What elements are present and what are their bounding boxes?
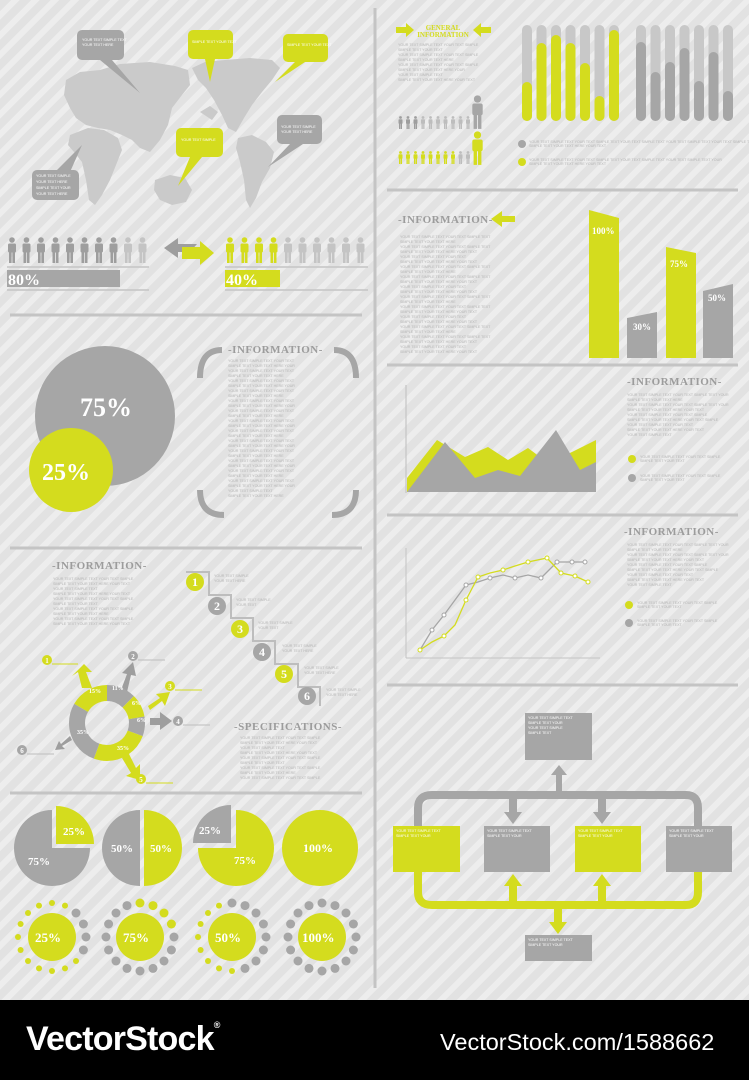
panel: information bracket: YOUR TEXT SIMPLE TEXT <box>228 489 274 493</box>
panel: information bracket: YOUR TEXT SIMPLE TEXT YOUR TEXT <box>228 479 295 483</box>
circles 75/25 <box>29 346 175 512</box>
line chart <box>406 526 729 658</box>
callout: map bubbles: SIMPLE TEXT YOUR <box>36 186 71 190</box>
area chart: SIMPLE TEXT YOUR TEXT HERE YOUR TEXT <box>627 408 705 412</box>
panel: information bracket: SIMPLE TEXT YOUR TEXT HERE YOUR <box>228 384 295 388</box>
footer: watermark bar <box>0 1000 749 1080</box>
pie charts row: 25% <box>63 826 85 838</box>
line chart: YOUR TEXT SIMPLE TEXT YOUR TEXT SIMPLE <box>637 619 718 623</box>
pie charts row: 75% <box>28 856 50 868</box>
panel: specifications: YOUR TEXT SIMPLE TEXT YOUR TEXT SIMPLE <box>240 776 321 780</box>
callout: map bubbles: YOUR TEXT SIMPLE <box>36 174 71 178</box>
line chart: YOUR TEXT SIMPLE TEXT YOUR TEXT SIMPLE TEXT YOUR <box>627 553 729 557</box>
circles 75/25: 75% <box>80 393 132 422</box>
callout: map bubbles: YOUR TEXT SIMPLE TEXT <box>82 38 128 42</box>
flowchart: YOUR TEXT SIMPLE TEXT <box>528 716 574 720</box>
panel: information bracket: SIMPLE TEXT YOUR TEXT HERE YOUR <box>228 424 295 428</box>
panel: information bar chart: SIMPLE TEXT YOUR TEXT HERE <box>400 270 456 274</box>
area chart <box>406 376 729 493</box>
donut chart with arrows: 15% <box>89 689 101 695</box>
panel: information bar chart: 30% <box>633 322 651 332</box>
panel: information bracket: YOUR TEXT SIMPLE TEXT YOUR TEXT <box>228 469 295 473</box>
staircase steps 1-6: YOUR TEXT SIMPLE <box>214 574 249 578</box>
footer url: VectorStock.com/1588662 <box>440 1029 714 1055</box>
flowchart: YOUR TEXT SIMPLE TEXT <box>669 829 715 833</box>
panel: information bracket <box>200 344 356 515</box>
panel: information bar chart: YOUR TEXT SIMPLE TEXT YOUR TEXT SIMPLE TEXT <box>400 305 491 309</box>
panel: information text (left middle) <box>52 560 147 626</box>
footer logo text: VectorStock® <box>26 1020 220 1058</box>
panel: general information: SIMPLE TEXT YOUR TEXT HERE YOUR <box>398 68 465 72</box>
people rows 80% / 40%: 40% <box>226 272 258 289</box>
bar chart: rounded bars: SIMPLE TEXT YOUR TEXT HERE YOUR TEXT <box>529 144 607 148</box>
dot ring charts: 75% <box>123 930 149 945</box>
line chart: YOUR TEXT SIMPLE TEXT YOUR TEXT <box>627 573 694 577</box>
panel: information bracket: SIMPLE TEXT YOUR TEXT HERE <box>228 434 284 438</box>
panel: information bar chart: SIMPLE TEXT YOUR TEXT HERE YOUR TEXT <box>400 340 478 344</box>
donut chart with arrows <box>17 651 210 784</box>
area chart: SIMPLE TEXT YOUR TEXT HERE YOUR TEXT <box>627 428 705 432</box>
panel: information text (left middle): SIMPLE TEXT YOUR TEXT <box>53 602 98 606</box>
panel: specifications: SIMPLE TEXT YOUR TEXT HERE <box>240 771 296 775</box>
staircase steps 1-6: YOUR TEXT HERE <box>282 649 314 653</box>
pie charts row: 25% <box>199 825 221 837</box>
callout: map bubbles: YOUR TEXT HERE <box>82 43 114 47</box>
donut chart with arrows: 1 <box>45 657 49 665</box>
panel: information bracket: SIMPLE TEXT YOUR TEXT HERE YOUR <box>228 464 295 468</box>
area chart: YOUR TEXT SIMPLE TEXT <box>627 433 673 437</box>
panel: specifications: SIMPLE TEXT YOUR TEXT <box>240 761 285 765</box>
staircase steps 1-6: 6 <box>304 689 310 703</box>
donut chart with arrows: 5 <box>139 776 143 784</box>
area chart: SIMPLE TEXT YOUR TEXT <box>640 478 685 482</box>
area chart: -INFORMATION- <box>627 376 722 388</box>
callout: map bubbles: SIMPLE TEXT YOUR TEXT <box>287 43 332 47</box>
panel: specifications: YOUR TEXT SIMPLE TEXT YOUR TEXT SIMPLE <box>240 756 321 760</box>
panel: specifications: SIMPLE TEXT YOUR TEXT HERE YOUR TEXT <box>240 751 318 755</box>
staircase steps 1-6 <box>186 572 361 706</box>
panel: specifications: YOUR TEXT SIMPLE TEXT YOUR TEXT SIMPLE <box>240 766 321 770</box>
bar chart: rounded bars <box>518 25 749 166</box>
callout: map bubbles: YOUR TEXT SIMPLE <box>281 125 316 129</box>
pie charts row: 50% <box>111 843 133 855</box>
panel: information bar chart: YOUR TEXT SIMPLE TEXT YOUR TEXT SIMPLE TEXT <box>400 235 491 239</box>
panel: information bracket: YOUR TEXT SIMPLE TEXT YOUR TEXT <box>228 399 295 403</box>
panel: information bracket: SIMPLE TEXT YOUR TEXT HERE <box>228 374 284 378</box>
donut chart with arrows: 35% <box>117 746 129 752</box>
panel: information bracket: SIMPLE TEXT YOUR TEXT HERE YOUR <box>228 484 295 488</box>
panel: general information: YOUR TEXT SIMPLE TEXT YOUR TEXT SIMPLE <box>398 53 479 57</box>
staircase steps 1-6: YOUR TEXT SIMPLE <box>282 644 317 648</box>
dot ring charts: 100% <box>302 930 334 945</box>
panel: information bar chart: 50% <box>708 293 726 303</box>
line chart: SIMPLE TEXT YOUR TEXT <box>637 605 682 609</box>
panel: information bar chart: SIMPLE TEXT YOUR TEXT HERE YOUR TEXT <box>400 250 478 254</box>
panel: information bracket: YOUR TEXT SIMPLE TEXT YOUR TEXT <box>228 359 295 363</box>
flowchart: SIMPLE TEXT YOUR <box>528 721 563 725</box>
panel: information bracket: -INFORMATION- <box>228 344 323 356</box>
donut chart with arrows: 6% <box>137 718 146 724</box>
area chart: SIMPLE TEXT YOUR TEXT <box>640 459 685 463</box>
panel: information bar chart: 100% <box>592 226 614 236</box>
panel: information bar chart: YOUR TEXT SIMPLE TEXT YOUR TEXT <box>400 345 467 349</box>
dot ring charts: 25% <box>35 930 61 945</box>
panel: information bar chart: YOUR TEXT SIMPLE TEXT YOUR TEXT SIMPLE TEXT <box>400 295 491 299</box>
panel: information text (left middle): SIMPLE TEXT YOUR TEXT HERE <box>53 612 109 616</box>
panel: information bracket: SIMPLE TEXT YOUR TEXT HERE <box>228 474 284 478</box>
line chart: SIMPLE TEXT YOUR TEXT HERE YOUR TEXT <box>627 558 705 562</box>
panel: information bracket: YOUR TEXT SIMPLE TEXT YOUR TEXT <box>228 429 295 433</box>
staircase steps 1-6: YOUR TEXT HERE <box>304 671 336 675</box>
dot ring charts <box>15 898 360 976</box>
callout: map bubbles: YOUR TEXT HERE <box>36 192 68 196</box>
area chart: SIMPLE TEXT YOUR TEXT HERE YOUR TEXT SIMPLE <box>627 418 719 422</box>
panel: information bar chart: SIMPLE TEXT YOUR TEXT HERE YOUR TEXT <box>400 290 478 294</box>
panel: information text (left middle): SIMPLE TEXT YOUR TEXT HERE YOUR TEXT <box>53 592 131 596</box>
staircase steps 1-6: YOUR TEXT SIMPLE <box>236 598 271 602</box>
flowchart: SIMPLE TEXT YOUR <box>669 834 704 838</box>
callout: map bubbles: YOUR TEXT HERE <box>281 130 313 134</box>
panel: information bar chart: SIMPLE TEXT YOUR TEXT HERE YOUR TEXT <box>400 260 478 264</box>
panel: information bar chart: SIMPLE TEXT YOUR TEXT HERE <box>400 300 456 304</box>
flowchart: YOUR TEXT SIMPLE TEXT <box>487 829 533 833</box>
panel: information text (left middle): YOUR TEXT SIMPLE TEXT YOUR TEXT SIMPLE <box>53 597 134 601</box>
panel: information bar chart: 75% <box>670 259 688 269</box>
donut chart with arrows: 35% <box>77 730 89 736</box>
panel: information bracket: SIMPLE TEXT YOUR TEXT HERE YOUR <box>228 444 295 448</box>
area chart: YOUR TEXT SIMPLE TEXT YOUR TEXT SIMPLE TEXT YOUR <box>627 403 729 407</box>
panel: information bar chart: YOUR TEXT SIMPLE TEXT YOUR TEXT <box>400 315 467 319</box>
line chart: SIMPLE TEXT YOUR TEXT HERE YOUR TEXT <box>627 578 705 582</box>
line chart: YOUR TEXT SIMPLE TEXT YOUR TEXT SIMPLE <box>627 563 708 567</box>
panel: information text (left middle): YOUR TEXT SIMPLE TEXT YOUR TEXT SIMPLE <box>53 607 134 611</box>
line chart: YOUR TEXT SIMPLE TEXT YOUR TEXT SIMPLE TEXT YOUR <box>627 543 729 547</box>
staircase steps 1-6: YOUR TEXT HERE <box>326 693 358 697</box>
flowchart: SIMPLE TEXT YOUR <box>578 834 613 838</box>
panel: information bar chart <box>398 210 733 358</box>
panel: information bar chart: YOUR TEXT SIMPLE TEXT YOUR TEXT SIMPLE TEXT <box>400 335 491 339</box>
arrows: swap <box>164 238 214 265</box>
circles 75/25: 25% <box>42 460 90 486</box>
callout: map bubbles: SIMPLE TEXT YOUR TEXT <box>192 40 237 44</box>
flowchart: YOUR TEXT SIMPLE TEXT <box>396 829 442 833</box>
panel: general information: GENERAL <box>426 24 461 32</box>
staircase steps 1-6: YOUR TEXT SIMPLE <box>304 666 339 670</box>
donut chart with arrows: 6 <box>20 747 24 755</box>
staircase steps 1-6: 3 <box>237 622 243 636</box>
panel: information bar chart: SIMPLE TEXT YOUR TEXT HERE YOUR TEXT <box>400 320 478 324</box>
panel: information bracket: SIMPLE TEXT YOUR TEXT HERE <box>228 394 284 398</box>
donut chart with arrows: 11% <box>112 686 124 692</box>
line chart: -INFORMATION- <box>624 526 719 538</box>
dot ring charts: 50% <box>215 930 241 945</box>
line chart: YOUR TEXT SIMPLE TEXT YOUR TEXT SIMPLE <box>637 601 718 605</box>
staircase steps 1-6: 2 <box>214 599 220 613</box>
staircase steps 1-6: YOUR TEXT HERE <box>214 579 246 583</box>
donut chart with arrows: 2 <box>131 653 135 661</box>
panel: information bracket: SIMPLE TEXT YOUR TEXT HERE YOUR <box>228 404 295 408</box>
bar chart: rounded bars: YOUR TEXT SIMPLE TEXT YOUR TEXT SIMPLE TEXT YOUR TEXT SIMPLE TEXT YOUR TEXT SIMPLE TEXT YOUR <box>529 158 722 162</box>
panel: information text (left middle): SIMPLE TEXT YOUR TEXT HERE YOUR TEXT <box>53 582 131 586</box>
panel: information text (left middle): YOUR TEXT SIMPLE TEXT <box>53 587 99 591</box>
people rows 80% / 40% <box>7 237 368 290</box>
flowchart: YOUR TEXT SIMPLE TEXT <box>578 829 624 833</box>
panel: information bracket: YOUR TEXT SIMPLE TEXT YOUR TEXT <box>228 449 295 453</box>
donut chart with arrows: 3 <box>168 683 172 691</box>
line chart: YOUR TEXT SIMPLE TEXT <box>627 583 673 587</box>
panel: information bracket: SIMPLE TEXT YOUR TEXT HERE <box>228 414 284 418</box>
panel: information bar chart: YOUR TEXT SIMPLE TEXT YOUR TEXT SIMPLE TEXT <box>400 275 491 279</box>
line chart: SIMPLE TEXT YOUR TEXT HERE YOUR TEXT SIMPLE <box>627 568 719 572</box>
panel: information bar chart: -INFORMATION- <box>398 214 493 226</box>
pie charts row: 100% <box>303 841 333 855</box>
panel: information bar chart: YOUR TEXT SIMPLE TEXT YOUR TEXT <box>400 255 467 259</box>
callout: map bubbles: YOUR TEXT HERE <box>36 180 68 184</box>
panel: specifications: -SPECIFICATIONS- <box>234 721 342 733</box>
panel: information bracket: YOUR TEXT SIMPLE TEXT YOUR TEXT <box>228 419 295 423</box>
staircase steps 1-6: 4 <box>259 645 265 659</box>
panel: information bracket: YOUR TEXT SIMPLE TEXT YOUR TEXT <box>228 459 295 463</box>
flowchart: SIMPLE TEXT <box>528 731 552 735</box>
pie charts row: 50% <box>150 843 172 855</box>
line chart: SIMPLE TEXT YOUR TEXT HERE <box>627 548 683 552</box>
flowchart: YOUR TEXT SIMPLE <box>528 726 563 730</box>
panel: information bracket: SIMPLE TEXT YOUR TEXT HERE <box>228 454 284 458</box>
staircase steps 1-6: YOUR TEXT SIMPLE <box>326 688 361 692</box>
callout: map bubbles <box>32 30 332 200</box>
flowchart: SIMPLE TEXT YOUR <box>528 943 563 947</box>
staircase steps 1-6: YOUR TEXT <box>236 603 257 607</box>
panel: general information: SIMPLE TEXT YOUR TEXT <box>398 48 443 52</box>
callout: map bubbles: YOUR TEXT SIMPLE <box>181 138 216 142</box>
staircase steps 1-6: YOUR TEXT <box>258 626 279 630</box>
panel: information bracket: YOUR TEXT SIMPLE TEXT YOUR TEXT <box>228 389 295 393</box>
panel: information text (left middle): YOUR TEXT SIMPLE TEXT YOUR TEXT SIMPLE <box>53 577 134 581</box>
area chart: YOUR TEXT SIMPLE TEXT YOUR TEXT SIMPLE <box>640 455 721 459</box>
panel: general information: YOUR TEXT SIMPLE TEXT YOUR TEXT SIMPLE <box>398 43 479 47</box>
line chart: SIMPLE TEXT YOUR TEXT <box>637 623 682 627</box>
panel: information text (left middle): -INFORMATION- <box>52 560 147 572</box>
panel: specifications: YOUR TEXT SIMPLE TEXT <box>240 746 286 750</box>
pie charts row <box>14 805 358 886</box>
panel: general information: INFORMATION <box>417 31 469 39</box>
world map <box>64 58 280 208</box>
panel: information bar chart: YOUR TEXT SIMPLE TEXT YOUR TEXT SIMPLE TEXT <box>400 265 491 269</box>
panel: specifications: SIMPLE TEXT YOUR TEXT HERE YOUR TEXT <box>240 741 318 745</box>
panel: general information <box>396 23 491 165</box>
donut chart with arrows: 4 <box>176 718 180 726</box>
staircase steps 1-6: 5 <box>281 667 287 681</box>
staircase steps 1-6: 1 <box>192 575 198 589</box>
panel: general information: SIMPLE TEXT YOUR TEXT HERE YOUR TEXT <box>398 78 476 82</box>
panel: general information: YOUR TEXT SIMPLE TEXT <box>398 73 444 77</box>
panel: information bar chart: YOUR TEXT SIMPLE TEXT YOUR TEXT SIMPLE TEXT <box>400 325 491 329</box>
people rows 80% / 40%: 80% <box>8 272 40 289</box>
area chart: YOUR TEXT SIMPLE TEXT YOUR TEXT <box>627 423 694 427</box>
panel: information bar chart: YOUR TEXT SIMPLE TEXT YOUR TEXT <box>400 285 467 289</box>
panel: information text (left middle): YOUR TEXT SIMPLE TEXT YOUR TEXT SIMPLE <box>53 617 134 621</box>
area chart: SIMPLE TEXT YOUR TEXT HERE <box>627 398 683 402</box>
panel: information bracket: YOUR TEXT SIMPLE TEXT YOUR TEXT <box>228 379 295 383</box>
panel: specifications <box>234 721 342 780</box>
panel: information bracket: YOUR TEXT SIMPLE TEXT YOUR TEXT <box>228 369 295 373</box>
panel: specifications: YOUR TEXT SIMPLE TEXT YOUR TEXT SIMPLE <box>240 736 321 740</box>
pie charts row: 75% <box>234 855 256 867</box>
donut chart with arrows: 6% <box>132 701 141 707</box>
bar chart: rounded bars: SIMPLE TEXT YOUR TEXT HERE YOUR TEXT <box>529 162 607 166</box>
panel: information bar chart: SIMPLE TEXT YOUR TEXT HERE YOUR TEXT <box>400 350 478 354</box>
panel: information bar chart: SIMPLE TEXT YOUR TEXT HERE YOUR TEXT <box>400 280 478 284</box>
panel: information bracket: SIMPLE TEXT YOUR TEXT HERE <box>228 494 284 498</box>
area chart: YOUR TEXT SIMPLE TEXT YOUR TEXT SIMPLE <box>640 474 721 478</box>
panel: information bar chart: YOUR TEXT SIMPLE TEXT YOUR TEXT SIMPLE TEXT <box>400 245 491 249</box>
panel: information bar chart: SIMPLE TEXT YOUR TEXT HERE YOUR TEXT <box>400 310 478 314</box>
panel: information bracket: YOUR TEXT SIMPLE TEXT YOUR TEXT <box>228 439 295 443</box>
panel: general information: SIMPLE TEXT YOUR TEXT HERE <box>398 58 454 62</box>
flowchart: SIMPLE TEXT YOUR <box>396 834 431 838</box>
area chart: YOUR TEXT SIMPLE TEXT YOUR TEXT SIMPLE <box>627 413 708 417</box>
staircase steps 1-6: YOUR TEXT SIMPLE <box>258 621 293 625</box>
panel: information bracket: YOUR TEXT SIMPLE TEXT YOUR TEXT <box>228 409 295 413</box>
panel: information bar chart: SIMPLE TEXT YOUR TEXT HERE <box>400 330 456 334</box>
flowchart: YOUR TEXT SIMPLE TEXT <box>528 938 574 942</box>
panel: information text (left middle): SIMPLE TEXT YOUR TEXT HERE YOUR TEXT <box>53 622 131 626</box>
flowchart: SIMPLE TEXT YOUR <box>487 834 522 838</box>
panel: information bracket: SIMPLE TEXT YOUR TEXT HERE YOUR <box>228 364 295 368</box>
area chart: YOUR TEXT SIMPLE TEXT YOUR TEXT SIMPLE TEXT YOUR <box>627 393 729 397</box>
flowchart <box>393 713 732 961</box>
panel: information bar chart: SIMPLE TEXT YOUR TEXT HERE <box>400 240 456 244</box>
panel: general information: YOUR TEXT SIMPLE TEXT YOUR TEXT SIMPLE <box>398 63 479 67</box>
